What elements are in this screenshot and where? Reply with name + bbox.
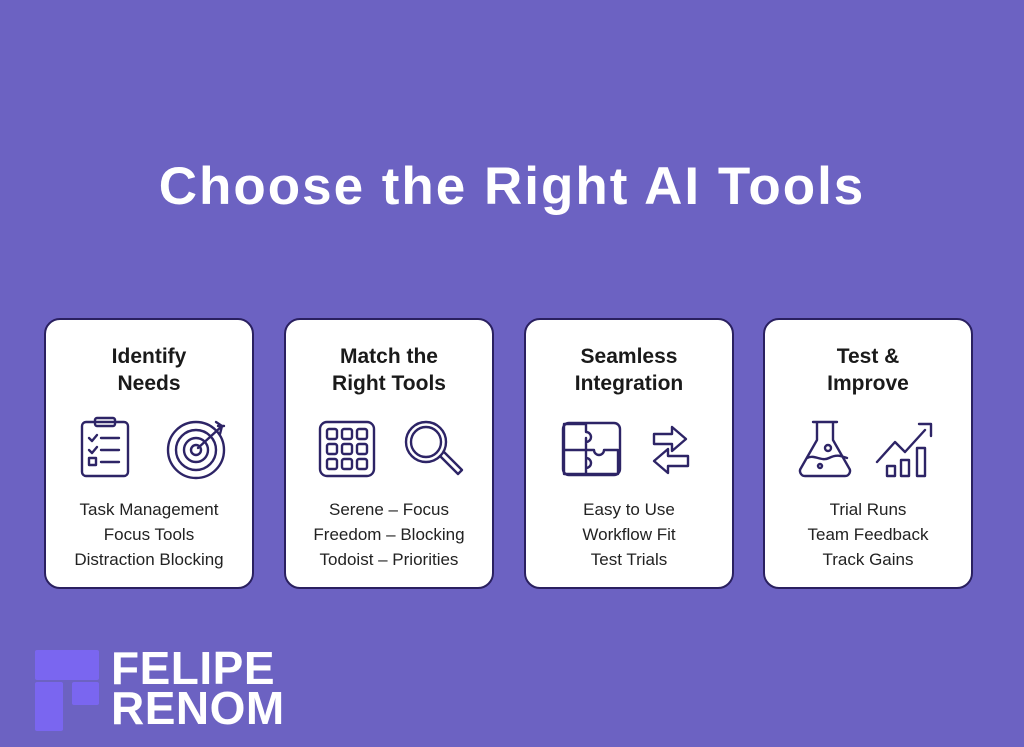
heading: Identify: [112, 345, 186, 368]
logo text: FELIPE: [111, 642, 275, 694]
body text: Workflow Fit: [582, 525, 676, 544]
icons: clipboard and target: [80, 416, 226, 480]
heading: [827, 345, 909, 395]
body text: Easy to Use: [583, 500, 675, 519]
body text: Task Management: [80, 500, 218, 519]
body text: [74, 500, 224, 569]
heading: Seamless: [581, 345, 677, 368]
panel: test & improve: [763, 318, 973, 589]
heading: Integration: [575, 372, 683, 395]
heading: Improve: [827, 372, 909, 395]
heading: [112, 345, 186, 395]
body text: Trial Runs: [830, 500, 906, 519]
heading: [575, 345, 683, 395]
icons: flask and growth chart: [798, 420, 932, 478]
body text: Todoist – Priorities: [320, 550, 458, 569]
body text: Serene – Focus: [329, 500, 449, 519]
body text: Team Feedback: [808, 525, 928, 544]
heading: Test &: [837, 345, 899, 368]
body text: [582, 500, 676, 569]
logo mark: [35, 650, 99, 731]
body text: Distraction Blocking: [74, 550, 224, 569]
logo text: [111, 642, 285, 734]
panel: match the right tools: [284, 318, 494, 589]
body text: Freedom – Blocking: [313, 525, 465, 544]
body text: Track Gains: [822, 550, 914, 569]
logo text: RENOM: [111, 682, 285, 734]
heading: [332, 345, 446, 395]
body text: [808, 500, 928, 569]
body text: Test Trials: [591, 550, 667, 569]
heading: Right Tools: [332, 372, 446, 395]
heading: Match the: [340, 345, 438, 368]
body text: [313, 500, 465, 569]
icons: grid and magnifier: [318, 420, 464, 478]
title: Choose the Right AI Tools: [159, 157, 865, 216]
icons: puzzle and arrows: [562, 422, 690, 476]
panel: identify needs: [44, 318, 254, 589]
body text: Focus Tools: [104, 525, 194, 544]
heading: Needs: [117, 372, 181, 395]
panel: seamless integration: [524, 318, 734, 589]
